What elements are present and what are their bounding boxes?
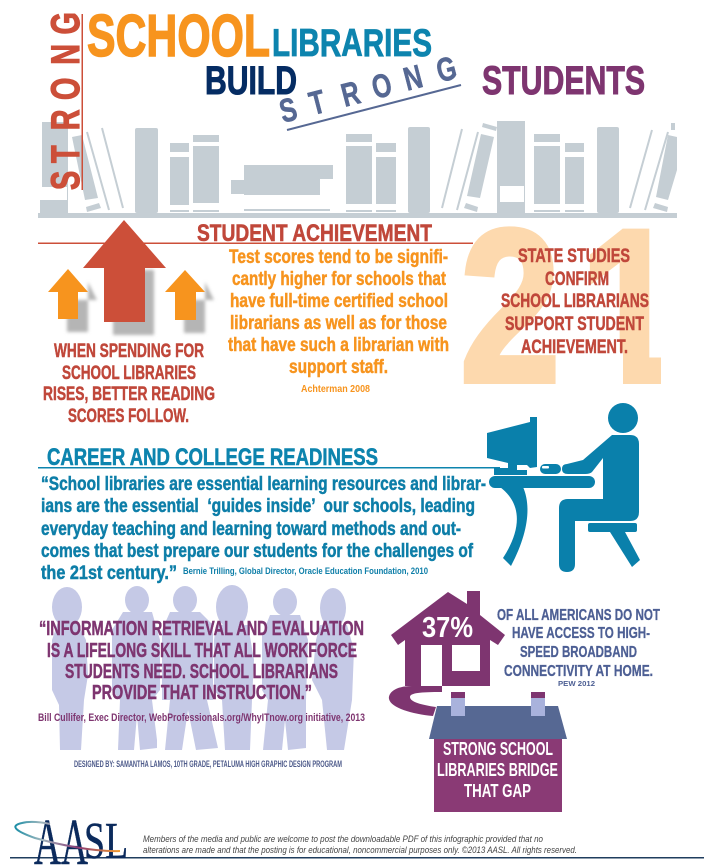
icon: person at computer	[487, 403, 640, 572]
text: test scores: Test scores tend to be signifi-	[229, 247, 448, 268]
text: test scores: cantly higher for schools that	[232, 269, 447, 290]
citation: Bill Cullifer: Bill Cullifer, Exec Director, WebProfessionals.org/WhyITnow.org initiative, 2013	[38, 712, 365, 724]
text: spending: WHEN SPENDING FOR	[54, 341, 204, 362]
text: spending	[43, 341, 215, 427]
title: LIBRARIES: LIBRARIES	[272, 22, 432, 65]
big number 21: 21	[460, 184, 680, 430]
footer rule	[10, 857, 704, 858]
heading: career and college readiness: CAREER AND COLLEGE READINESS	[47, 444, 378, 471]
text: state studies: CONFIRM	[545, 268, 609, 290]
icon: house with 37%	[389, 591, 505, 716]
quote: Bernie Trilling: everyday teaching and learning toward methods and out-	[41, 519, 461, 540]
title: BUILD: BUILD	[205, 59, 297, 103]
text: spending: SCHOOL LIBRARIES	[62, 363, 196, 384]
section rule	[38, 242, 473, 244]
quote: information retrieval: IS A LIFELONG SKILL THAT ALL WORKFORCE	[47, 640, 357, 662]
text: broadband statistic	[497, 607, 660, 680]
text: test scores	[228, 247, 449, 378]
text: disclaimer: Members of the media and public are welcome to post the downloadable PDF of this infographic provided that no	[143, 834, 543, 845]
text: state studies: SCHOOL LIBRARIANS	[501, 290, 649, 312]
text: test scores: have full-time certified school	[230, 291, 448, 312]
quote: information retrieval	[39, 618, 364, 704]
statistic: 37%: 37%	[422, 612, 473, 644]
title: diagonal STRONG: STRONG	[276, 50, 460, 131]
icon: rising arrows	[48, 220, 214, 335]
icon: school building	[429, 692, 567, 812]
title: STUDENTS: STUDENTS	[482, 59, 645, 103]
title: diagonal underline	[287, 85, 461, 130]
text: test scores: support staff.	[289, 357, 388, 378]
heading: student achievement: STUDENT ACHIEVEMENT	[197, 220, 432, 247]
text: test scores: that have such a librarian with	[228, 335, 449, 356]
text: bridge the gap: LIBRARIES BRIDGE	[437, 760, 558, 780]
quote: Bernie Trilling: comes that best prepare our students for the challenges of	[41, 541, 474, 562]
illustration: bookshelf	[38, 121, 677, 218]
text: broadband statistic: SPEED BROADBAND	[520, 644, 637, 661]
title: vertical STRONG: STRONG	[43, 12, 88, 190]
section rule	[38, 467, 500, 468]
text: spending: RISES, BETTER READING	[43, 384, 215, 405]
text: state studies: ACHIEVEMENT.	[521, 336, 628, 358]
quote: Bernie Trilling: “School libraries are essential learning resources and librar-	[41, 474, 486, 495]
title: SCHOOL: SCHOOL	[87, 3, 270, 69]
text: disclaimer: alterations are made and that the posting is for educational, noncommercial purposes only. ©2013 AASL. All rights reserved.	[143, 845, 577, 856]
text: state studies: SUPPORT STUDENT	[505, 313, 644, 335]
quote: Bernie Trilling: ians are the essential ‘guides inside’ our schools, leading	[41, 496, 475, 517]
quote: information retrieval: STUDENTS NEED. SCHOOL LIBRARIANS	[65, 661, 338, 683]
text: bridge the gap: STRONG SCHOOL	[443, 739, 553, 759]
text: broadband statistic: HAVE ACCESS TO HIGH-	[512, 625, 650, 642]
text: spending: SCORES FOLLOW.	[68, 406, 189, 427]
citation: Achterman: Achterman 2008	[301, 384, 370, 395]
quote: Bernie Trilling: the 21st century.”	[41, 563, 177, 584]
citation: Pew: PEW 2012	[558, 679, 595, 688]
credit: designer: DESIGNED BY: SAMANTHA LAMOS, 10TH GRADE, PETALUMA HIGH GRAPHIC DESIGN PROGRAM	[74, 759, 342, 769]
quote: information retrieval: PROVIDE THAT INSTRUCTION.”	[92, 682, 312, 704]
citation: Bernie Trilling: Bernie Trilling, Global Director, Oracle Education Foundation, 2010	[183, 566, 428, 576]
quote: Bernie Trilling	[41, 474, 486, 584]
illustration: people silhouettes	[52, 585, 354, 750]
text: state studies: STATE STUDIES	[518, 245, 630, 267]
text: broadband statistic: CONNECTIVITY AT HOME.	[504, 663, 653, 680]
text: state studies	[501, 245, 649, 358]
text: test scores: librarians as well as for those	[230, 313, 447, 334]
text: bridge the gap: THAT GAP	[464, 781, 531, 801]
text: disclaimer	[143, 834, 577, 856]
text: bridge the gap	[437, 739, 558, 801]
title rule	[82, 14, 83, 190]
quote: information retrieval: “INFORMATION RETRIEVAL AND EVALUATION	[39, 618, 364, 640]
text: broadband statistic: OF ALL AMERICANS DO NOT	[497, 607, 660, 624]
